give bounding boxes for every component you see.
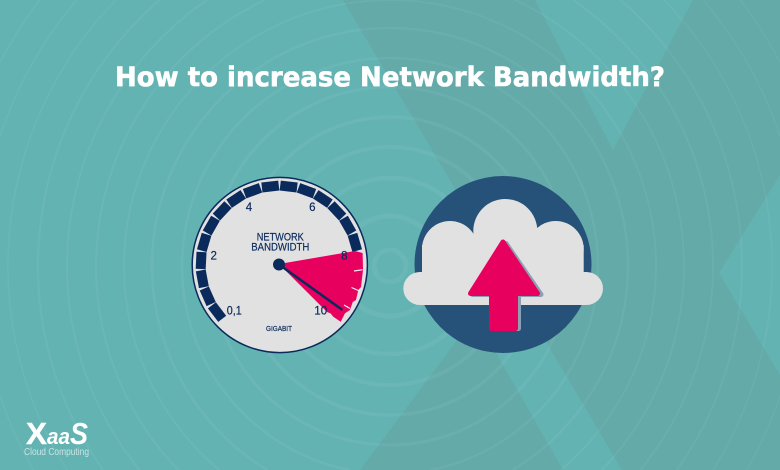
gauge: network bandwidth — [192, 177, 367, 353]
title: How to increase Network Bandwidth? — [115, 62, 665, 93]
upload arrow shadow — [472, 244, 541, 328]
gauge labels: 2 — [210, 250, 217, 262]
gauge labels: 8 — [341, 250, 348, 262]
gauge labels: NETWORK — [257, 232, 304, 244]
gauge labels — [210, 202, 348, 333]
gauge labels: BANDWIDTH — [251, 242, 309, 254]
logo: XaaS Cloud Computing — [24, 416, 89, 458]
gauge dial face — [192, 177, 367, 353]
cloud — [403, 199, 603, 305]
gauge scale segments — [196, 181, 362, 322]
gauge needle — [273, 258, 342, 310]
icon: cloud upload — [403, 176, 603, 353]
logo: XaaS Cloud Computing: Cloud Computing — [24, 447, 89, 458]
logo: XaaS Cloud Computing: S — [70, 416, 88, 451]
upload arrow — [470, 242, 538, 328]
gauge labels: 0,1 — [227, 306, 242, 318]
logo: XaaS Cloud Computing: aa — [47, 424, 70, 449]
gauge labels: 4 — [246, 202, 253, 214]
gauge labels: 6 — [309, 202, 316, 214]
sector tick marks — [344, 270, 363, 308]
gauge labels: 10 — [314, 306, 327, 318]
gauge labels: GIGABIT — [266, 324, 292, 333]
navy circle — [414, 176, 592, 353]
logo: XaaS Cloud Computing: X — [26, 416, 47, 451]
red high-bandwidth sector — [279, 251, 363, 322]
